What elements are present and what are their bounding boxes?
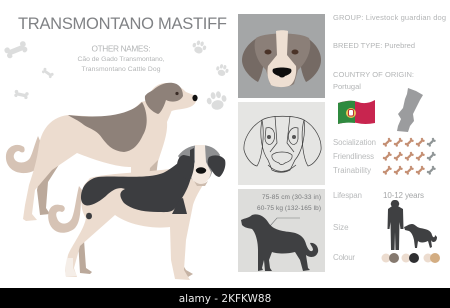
measurements: 75-85 cm (30-33 in)	[262, 194, 321, 201]
other names text block: OTHER NAMES:	[92, 44, 150, 54]
panel: line drawing of dog face	[238, 102, 325, 185]
rating labels: Socialization	[333, 138, 376, 147]
head	[146, 83, 197, 125]
colour label: Colour	[333, 253, 355, 262]
black coat	[81, 160, 192, 212]
white sock	[65, 258, 77, 277]
nose	[196, 167, 206, 174]
grey saddle patch	[68, 102, 147, 152]
blaze and muzzle	[267, 30, 296, 87]
size label: Size	[333, 223, 349, 232]
other names text block: Cão de Gado Transmontano,	[78, 56, 165, 63]
dog silhouette	[241, 214, 318, 271]
title: TRANSMONTANO MASTIFF	[18, 15, 227, 33]
measurements: 60-75 kg (132-165 lb)	[257, 205, 321, 212]
head	[255, 34, 310, 87]
tail	[6, 136, 44, 173]
decorative bones and paws	[4, 39, 230, 111]
rating labels: Friendliness	[333, 152, 374, 161]
nose	[192, 95, 198, 101]
rump spot	[86, 213, 92, 219]
rating labels	[333, 138, 376, 175]
icon: human silhouette	[388, 200, 404, 250]
ears	[242, 36, 264, 82]
head	[178, 145, 220, 183]
icon: small dog silhouette	[404, 224, 437, 248]
illustration: black and tan dog standing	[48, 145, 225, 280]
illustration: tan and grey dog standing	[6, 83, 198, 221]
text block: group: GROUP: Livestock guardian dog	[333, 13, 446, 22]
far hind leg	[37, 160, 62, 215]
nose	[273, 68, 291, 78]
icon: map of portugal	[397, 88, 423, 132]
text block: country of origin: COUNTRY OF ORIGIN:	[333, 70, 414, 79]
panel: size silhouette	[238, 189, 325, 272]
eyes	[264, 50, 272, 54]
measurements	[257, 194, 321, 212]
text block: country of origin: Portugal	[333, 82, 361, 91]
lifespan value: 10-12 years	[383, 191, 424, 200]
other names text block: Transmontano Cattle Dog	[82, 66, 161, 73]
icon: portuguese flag	[338, 100, 375, 124]
watermark bar	[0, 288, 450, 308]
body and near hind leg	[23, 100, 172, 221]
leader line	[270, 218, 300, 226]
ears	[177, 155, 194, 180]
watermark bar: alamy - 2KFKW88	[179, 293, 271, 305]
rating bones	[382, 137, 436, 175]
other names text block	[78, 44, 165, 73]
text block: country of origin	[333, 70, 414, 91]
tail	[48, 186, 82, 233]
rating labels: Trainability	[333, 166, 371, 175]
body and near legs	[65, 165, 205, 280]
panel: dog face on grey	[238, 14, 325, 98]
far front leg shade	[146, 160, 158, 210]
chest patch	[172, 198, 187, 214]
colour swatches	[382, 253, 440, 263]
far legs	[78, 212, 98, 274]
text block: breed type: BREED TYPE: Purebred	[333, 41, 415, 50]
lifespan label: Lifespan	[333, 191, 362, 200]
